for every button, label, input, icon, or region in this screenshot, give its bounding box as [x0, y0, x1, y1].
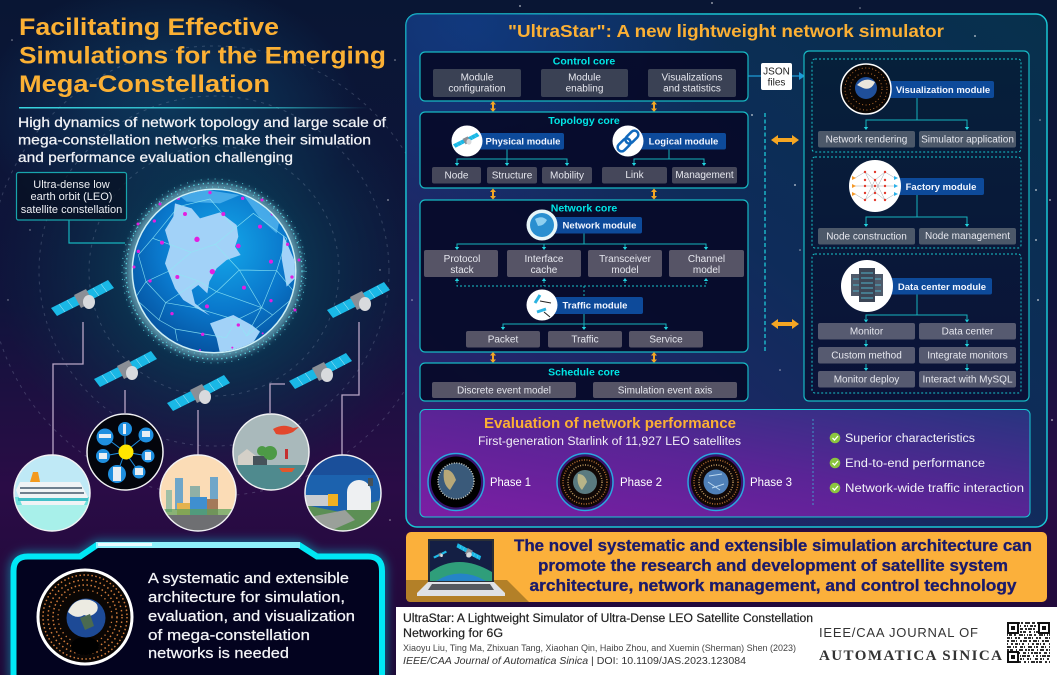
data center module: Data center [942, 326, 994, 338]
topology core: Structure [492, 170, 533, 182]
evaluation results [830, 433, 1024, 495]
JSON files: files [768, 78, 785, 88]
visualization module [812, 59, 1021, 152]
data center module: Integrate monitors [927, 350, 1008, 362]
phase 1 [428, 454, 531, 510]
journal logo: AUTOMATICA SINICA [819, 648, 1002, 664]
icon: observatory and truck [305, 455, 381, 531]
network core: stack [450, 265, 475, 276]
visualization module: Network rendering [826, 134, 907, 146]
traffic module: Traffic module [563, 300, 627, 312]
network core: Protocol [444, 254, 480, 265]
core-to-module connector [765, 113, 799, 352]
control core: and statistics [663, 84, 721, 94]
panel: need for architecture [14, 542, 382, 675]
network core: Service [649, 334, 683, 346]
subtitle text block: and performance evaluation challenging [18, 149, 293, 165]
evaluation subtitle: First-generation Starlink of 11,927 LEO satellites [478, 436, 741, 448]
visualization module: Simulator application [921, 134, 1014, 146]
need text block: networks is needed [148, 645, 289, 662]
network core: Packet [488, 334, 519, 346]
icon: smart home IoT [87, 414, 163, 490]
callout: LEO constellation: satellite constellation [21, 204, 122, 216]
conclusion text: The novel systematic and extensible simulation architecture can [514, 537, 1032, 555]
citation authors: Xiaoyu Liu, Ting Ma, Zhixuan Tang, Xiaohan Qin, Haibo Zhou, and Xuemin (Sherman) Shen (2023) [403, 643, 796, 654]
network core: Channel [688, 254, 725, 265]
journal logo: IEEE/CAA JOURNAL OF [819, 625, 978, 640]
title [19, 14, 386, 98]
title: Facilitating Effective [19, 14, 279, 41]
topology core: Topology core [548, 115, 620, 127]
schedule core: Schedule core [548, 366, 620, 378]
phase 2 [557, 454, 662, 510]
control core: Module [568, 72, 601, 84]
panel: modules [804, 51, 1029, 401]
citation title: UltraStar: A Lightweight Simulator of Ultra-Dense LEO Satellite Constellation [403, 613, 813, 625]
need text block: architecture for simulation, [148, 589, 345, 606]
network core: Interface [525, 254, 564, 265]
factory module: Node construction [826, 232, 907, 242]
conclusion text [514, 537, 1032, 595]
need text block: evaluation, and visualization [148, 608, 355, 625]
icon: cruise ship [14, 455, 90, 531]
data center module: Interact with MySQL [922, 374, 1013, 386]
journal logo [819, 625, 1002, 664]
QR code [1007, 623, 1050, 662]
evaluation results: Superior characteristics [845, 433, 975, 445]
arrows: topology to network [490, 188, 657, 200]
data center module: Data center module [898, 282, 986, 293]
control core: Control core [553, 56, 615, 68]
evaluation heading: Evaluation of network performance [484, 416, 736, 432]
phase 2: Phase 2 [620, 477, 662, 489]
conclusion text: architecture, network management, and control technology [530, 577, 1017, 595]
logical module [612, 126, 726, 156]
control core: Visualizations [662, 72, 722, 84]
schedule core: Discrete event model [457, 386, 551, 396]
icon: earth with orbiting satellites [38, 570, 132, 664]
icon: laptop with satellite [417, 537, 505, 596]
control core: Module [461, 72, 494, 84]
subtitle text block: mega-constellation networks make their simulation [18, 132, 371, 148]
callout: LEO constellation: Ultra-dense low [33, 179, 110, 191]
arrows: control to topology [490, 101, 657, 112]
control core: enabling [566, 84, 603, 94]
globe [122, 179, 306, 363]
network core: model [693, 265, 720, 276]
conclusion text: promote the research and development of satellite system [538, 557, 1008, 575]
subtitle text block: High dynamics of network topology and large scale of [18, 114, 386, 130]
need text block: of mega-constellation [148, 627, 310, 644]
data center module: Custom method [831, 350, 902, 362]
panel heading: "UltraStar": A new lightweight network simulator [508, 21, 944, 41]
satellites [51, 280, 390, 411]
topology core: Management [675, 170, 734, 181]
schedule core [420, 363, 748, 401]
topology core: Mobility [550, 170, 584, 182]
citation title [403, 613, 813, 640]
citation journal: IEEE/CAA Journal of Automatica Sinica | DOI: 10.1109/JAS.2023.123084 [403, 655, 746, 667]
factory module: Node management [925, 231, 1010, 242]
network module [526, 210, 642, 240]
evaluation results: End-to-end performance [845, 458, 985, 470]
citation panel [396, 607, 1057, 675]
topology core [420, 112, 748, 188]
JSON files: JSON [763, 66, 790, 78]
control core [420, 52, 748, 101]
panel: evaluation [420, 410, 1030, 517]
JSON files [748, 63, 805, 90]
icon: city [160, 455, 236, 531]
network core: Network core [551, 202, 617, 214]
need text block [148, 570, 355, 662]
data center module: Monitor [850, 326, 884, 338]
need text block: A systematic and extensible [148, 570, 349, 587]
topology core: Node [445, 170, 469, 182]
title underline [19, 107, 369, 108]
data center module [812, 254, 1021, 393]
control core: configuration [448, 84, 506, 94]
arrows: network to schedule [490, 352, 657, 363]
topology core: Link [625, 170, 645, 181]
schedule core: Simulation event axis [618, 386, 712, 396]
physical module: Physical module [486, 136, 560, 148]
phase 3: Phase 3 [750, 477, 792, 489]
conclusion banner [406, 532, 1047, 602]
title: Simulations for the Emerging [19, 42, 386, 70]
network core: Traffic [571, 334, 599, 346]
network core: Transceiver [599, 254, 652, 265]
traffic module [526, 290, 643, 320]
phase 1: Phase 1 [490, 477, 531, 489]
network core [420, 200, 748, 352]
title: Mega-Constellation [19, 71, 270, 98]
network core: model [611, 265, 639, 276]
physical module [452, 126, 564, 156]
data center module: Monitor deploy [834, 374, 899, 386]
icon: flood rescue [233, 414, 309, 490]
evaluation results: Network-wide traffic interaction [845, 483, 1024, 495]
callout: LEO constellation: earth orbit (LEO) [31, 191, 112, 203]
subtitle text block [18, 114, 386, 165]
panel: UltraStar simulator [406, 14, 1047, 527]
factory module [812, 157, 1021, 248]
factory module: Factory module [906, 182, 976, 193]
network module: Network module [563, 220, 636, 232]
logical module: Logical module [649, 136, 718, 148]
callout: LEO constellation [16, 172, 126, 243]
satellite links [53, 322, 359, 455]
visualization module: Visualization module [896, 85, 990, 96]
phase 3 [688, 454, 792, 510]
citation title: Networking for 6G [403, 628, 503, 640]
network core: cache [531, 265, 558, 276]
